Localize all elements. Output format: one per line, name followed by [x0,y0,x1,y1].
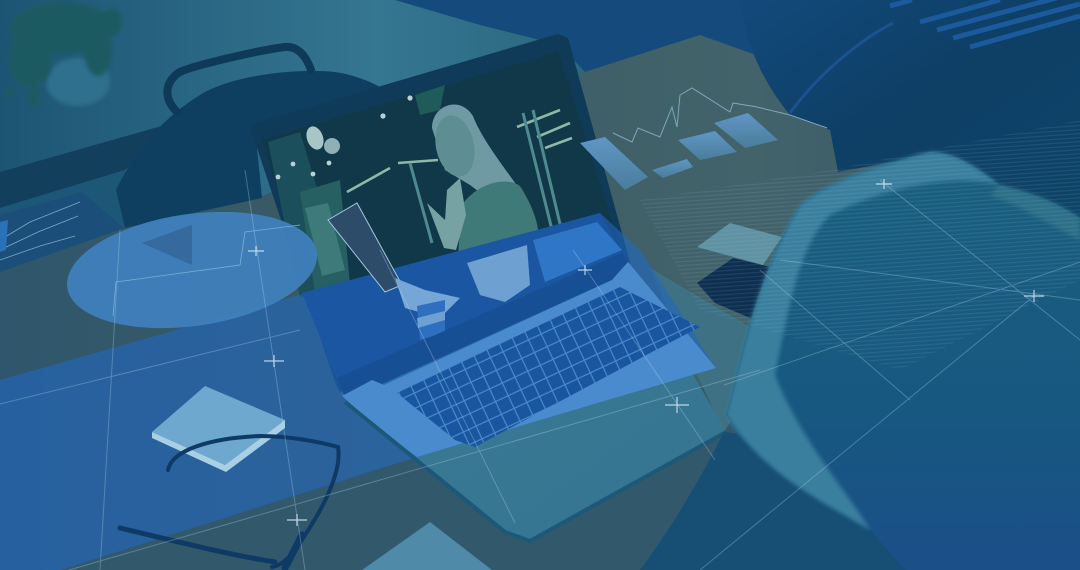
curved blue line on head [790,23,893,113]
line chart upper center [613,88,827,142]
shirt sleeve highlight [726,152,1000,530]
sparkle markers [248,179,1044,526]
shelf ledge on the left [0,125,172,208]
cup [417,300,445,340]
laptop keyboard deck [342,262,716,457]
document held in video [328,203,402,292]
person in video: shirt [458,181,538,268]
shelves in the video background [347,110,572,192]
top right bars [890,0,1080,47]
translucent blue band overlay [0,213,716,570]
shoulder highlight [990,185,1080,240]
person in foreground: dark lower arm [640,432,920,570]
darker desk area lower center [40,380,760,570]
pie chart on screen [276,95,413,179]
laptop display [262,52,622,378]
pie chart ellipse [59,197,325,343]
scan lines over desk and shirt [640,120,1080,370]
hand holding document [395,278,460,318]
icon: potted plant [6,2,122,108]
laptop lid [250,34,630,392]
blue band inside the display [302,213,622,378]
grid lines [0,170,1080,570]
laptop base [340,262,726,543]
keyboard [397,287,700,447]
person in foreground: shirt [726,152,1080,570]
notebook on the desk [697,223,782,265]
person in video: raised hand [427,178,466,250]
person in video: hair [432,105,520,200]
laptop hinge band [337,253,628,397]
panel: small chart on the left [0,192,124,272]
paper at the bottom edge [362,522,492,570]
floor under the ledge [0,170,130,272]
office chair [116,47,382,228]
person in foreground: head [740,0,1080,225]
person in video: face [430,112,480,180]
eyeglasses [120,436,339,568]
bar chart upper center [580,113,778,190]
video lower right light panel [533,222,622,282]
person in video: arm [467,245,530,302]
sofa in the background [395,0,760,72]
video background blocks [268,132,345,298]
sticky note pad [152,386,285,472]
laptop front edge [345,402,726,541]
panel: grey sheet under laptop right side [650,268,755,432]
phone on the desk [697,258,770,320]
